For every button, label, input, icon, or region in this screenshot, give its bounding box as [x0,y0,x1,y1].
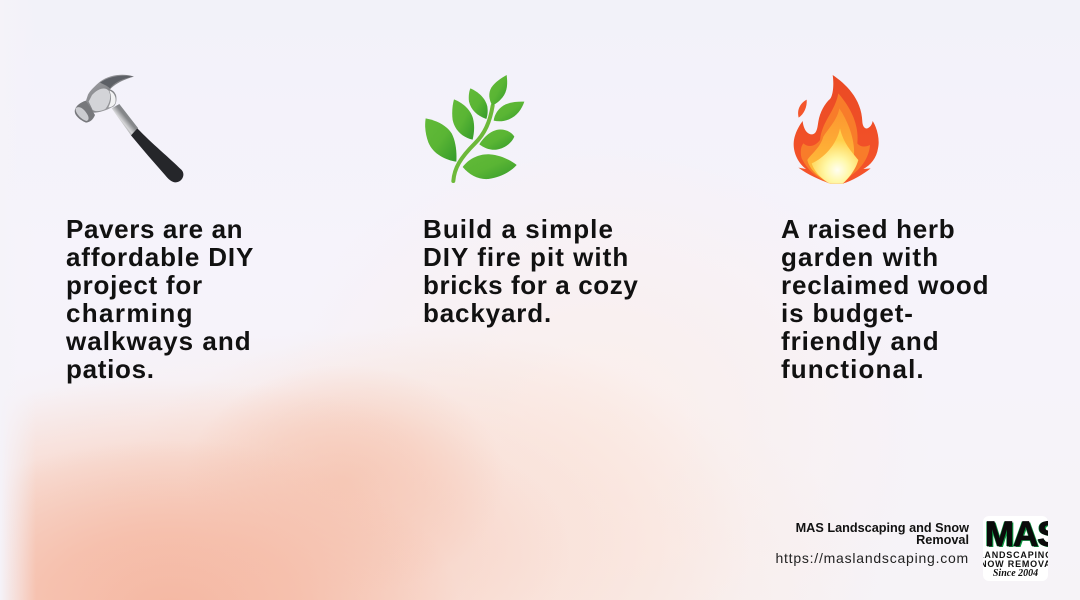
face [75,101,95,123]
text: pavers [66,214,254,384]
brand text: https://maslandscaping.com [775,550,969,566]
brand text: Removal [916,533,969,547]
brand text [775,521,969,566]
text: fire pit: DIY fire pit with [423,242,629,272]
text: herb garden [781,214,989,384]
text: pavers: patios. [66,354,155,384]
text: herb garden: reclaimed wood [781,270,989,300]
icon: herb leaves [425,75,524,183]
text: herb garden: A raised herb [781,214,955,244]
text: fire pit: bricks for a cozy [423,270,638,300]
head [86,75,134,113]
text: herb garden: functional. [781,354,925,384]
leaves [425,75,524,179]
text: pavers: walkways and [66,326,252,356]
text: pavers: Pavers are an [66,214,243,244]
text: pavers: project for [66,270,203,300]
icon: fire [794,75,879,184]
text: herb garden: garden with [781,242,939,272]
text: herb garden: is budget- [781,298,914,328]
text: pavers: affordable DIY [66,242,254,272]
icon: hammer [74,74,184,182]
text: herb garden: friendly and [781,326,940,356]
logo [983,516,1048,581]
text: fire pit: Build a simple [423,214,614,244]
brand text: MAS Landscaping and Snow [796,521,969,535]
text: fire pit [423,214,638,328]
grip [131,128,183,182]
text: fire pit: backyard. [423,298,552,328]
text: pavers: charming [66,298,194,328]
logo: Since 2004 [993,568,1038,579]
stem [453,106,493,181]
shank [112,104,138,135]
